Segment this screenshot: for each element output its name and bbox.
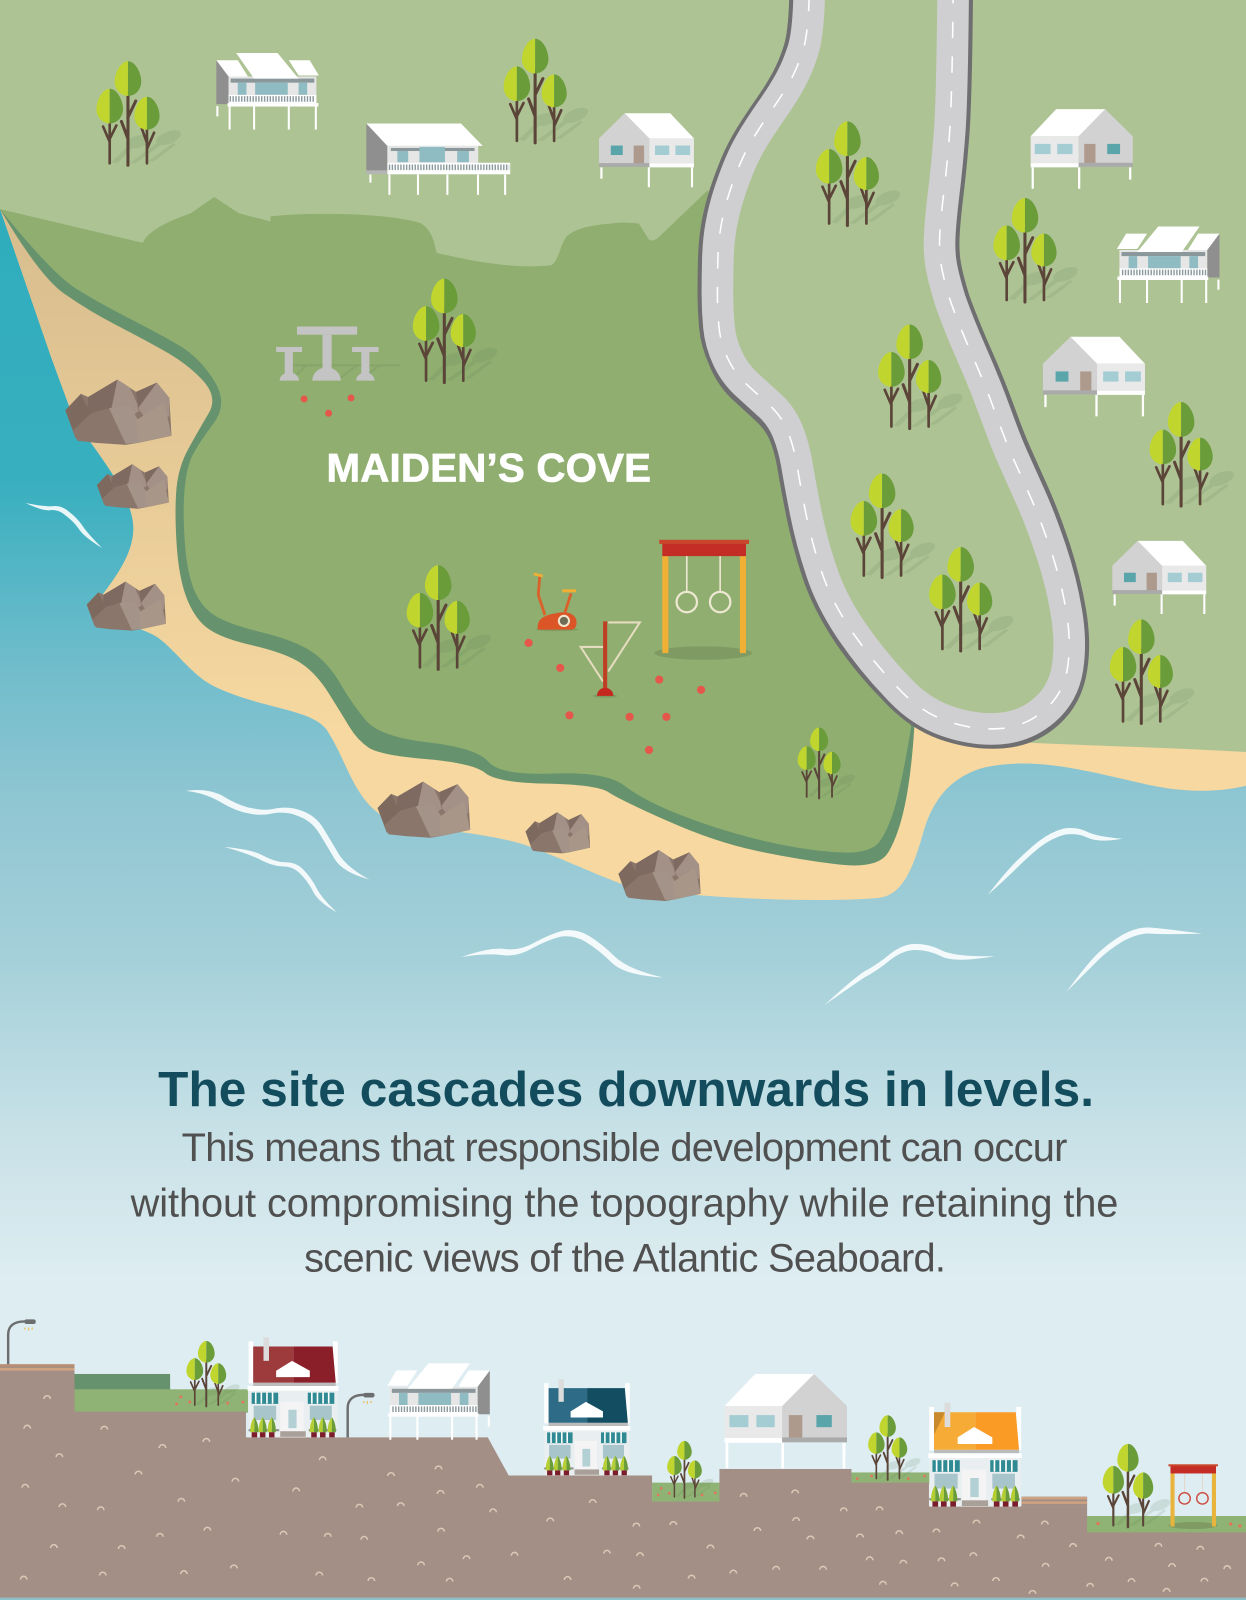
aerial map of the site <box>0 0 1246 1005</box>
orange roof shop house <box>928 1403 1022 1507</box>
place label: Maiden's Cove: MAIDEN’S COVE <box>327 446 651 491</box>
section trees <box>186 1341 1172 1527</box>
stepped ground <box>0 1373 1246 1598</box>
bottom water strip <box>0 1596 1246 1600</box>
exercise bike <box>534 574 579 631</box>
small red flowers <box>301 394 705 754</box>
section flowers <box>175 1396 1242 1528</box>
large gable stilt house <box>725 1374 847 1468</box>
gymnastic rings frame <box>654 540 752 660</box>
picnic table and stools <box>276 327 400 381</box>
heading: The site cascades downwards in levels. <box>158 1062 1094 1117</box>
stone speckles in ground <box>20 1396 1230 1594</box>
street lamp left <box>8 1319 36 1364</box>
house with deck <box>366 123 510 195</box>
beach sand <box>0 209 1246 900</box>
body text: without compromising the topography while retaining the <box>130 1181 1118 1225</box>
cove green lawn <box>0 190 911 853</box>
cross section of the site <box>0 1319 1246 1600</box>
dark green cove edge <box>0 209 914 866</box>
street lamp centre <box>348 1393 375 1437</box>
waves <box>26 503 1202 1005</box>
triple roof stilt house <box>387 1363 490 1440</box>
trees on the map <box>96 39 1236 798</box>
body text <box>130 1126 1118 1280</box>
blue roof shop house <box>543 1379 630 1475</box>
upper light green land <box>0 0 1246 752</box>
green terraces <box>74 1374 1246 1533</box>
body text: This means that responsible development can occur <box>182 1126 1067 1170</box>
red roof shop house <box>248 1337 338 1437</box>
wooden boards right <box>1021 1497 1087 1506</box>
body text: scenic views of the Atlantic Seaboard. <box>304 1236 946 1280</box>
winding road <box>713 0 1073 733</box>
mini gymnastic rings <box>1168 1464 1218 1529</box>
wooden boards left <box>0 1364 74 1374</box>
balance pole with triangles <box>581 621 640 698</box>
rocks on the beach <box>65 380 701 901</box>
stilt houses on the map <box>216 53 1219 614</box>
